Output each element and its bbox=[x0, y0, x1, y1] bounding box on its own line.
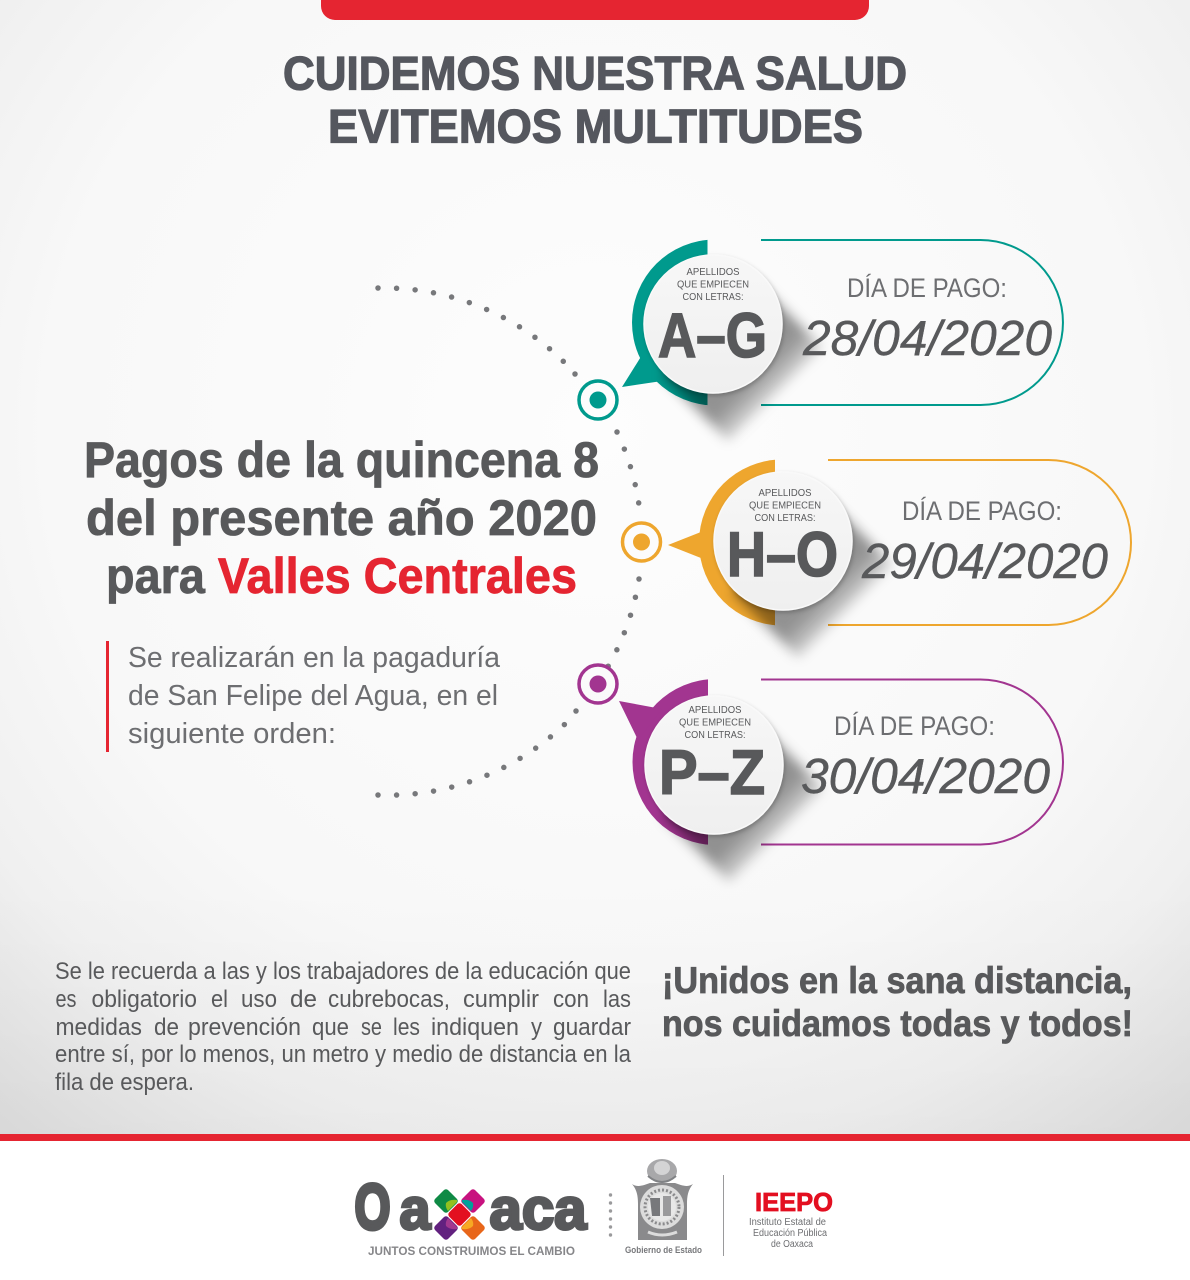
disc caption bbox=[679, 705, 751, 741]
reminder paragraph: medidas bbox=[56, 1014, 142, 1041]
reminder paragraph: es bbox=[56, 986, 76, 1013]
letters: A–G bbox=[658, 301, 767, 371]
logo divider bbox=[723, 1175, 724, 1256]
panel: H-O bbox=[668, 460, 1131, 658]
speech arc and tail bbox=[668, 460, 775, 626]
panel: P-Z bbox=[619, 679, 1063, 882]
title bbox=[283, 46, 907, 152]
heading: pagos: Pagos de la quincena 8 bbox=[84, 432, 599, 488]
disc caption: QUE EMPIECEN bbox=[677, 280, 749, 290]
logo: IEEPO bbox=[749, 1187, 833, 1250]
disc caption: CON LETRAS: bbox=[754, 513, 816, 524]
target marker: orange bbox=[622, 523, 660, 561]
disc caption: APELLIDOS bbox=[688, 705, 742, 716]
text block: location bbox=[106, 641, 501, 752]
disc caption bbox=[749, 488, 821, 524]
long shadow bbox=[732, 498, 892, 658]
long shadow bbox=[663, 722, 823, 882]
pill outline bbox=[761, 680, 1063, 844]
caption: Gobierno de Estado bbox=[625, 1245, 702, 1255]
pay date: 29/04/2020 bbox=[861, 535, 1108, 589]
text block: location: siguiente orden: bbox=[128, 718, 336, 750]
reminder paragraph: indiquen bbox=[431, 1014, 519, 1041]
reminder paragraph: y bbox=[531, 1014, 542, 1041]
letters: P–Z bbox=[659, 738, 765, 808]
wordmark: O bbox=[354, 1171, 390, 1243]
colored diamonds bbox=[433, 1188, 486, 1241]
pay date: 30/04/2020 bbox=[801, 750, 1050, 804]
logo: coat of arms bbox=[625, 1159, 702, 1255]
slogan: ¡Unidos en la sana distancia, bbox=[662, 960, 1132, 1001]
heading: pagos: del presente año 2020 bbox=[86, 490, 597, 546]
reminder paragraph: cubrebocas, bbox=[328, 986, 450, 1013]
heading: pagos: para Valles Centrales bbox=[106, 548, 577, 604]
panel: A-G bbox=[622, 240, 1063, 441]
reminder paragraph: prevención bbox=[188, 1014, 301, 1041]
disc caption: QUE EMPIECEN bbox=[749, 500, 821, 512]
letters: H–O bbox=[727, 520, 838, 590]
reminder paragraph: entre sí, por lo menos, un metro y medio de distancia en la bbox=[55, 1041, 632, 1068]
long shadow bbox=[662, 281, 822, 441]
text block: location: Se realizarán en la pagaduría bbox=[128, 642, 501, 674]
top red bar bbox=[321, 0, 869, 20]
pay label: DÍA DE PAGO: bbox=[902, 496, 1062, 526]
reminder paragraph: les bbox=[393, 1014, 420, 1041]
reminder paragraph: de bbox=[290, 986, 317, 1013]
pill outline bbox=[828, 460, 1131, 625]
speech arc and tail bbox=[619, 679, 708, 845]
letter disc bbox=[645, 696, 783, 834]
reminder paragraph bbox=[55, 958, 632, 1096]
wordmark bbox=[354, 1171, 587, 1243]
letter disc bbox=[714, 472, 852, 610]
reminder paragraph: las bbox=[603, 986, 631, 1013]
red band bbox=[0, 1134, 1190, 1141]
logo: IEEPO: Educación Pública bbox=[753, 1228, 827, 1239]
disc caption: APELLIDOS bbox=[686, 267, 740, 278]
slogan bbox=[662, 960, 1133, 1044]
reminder paragraph: obligatorio bbox=[92, 986, 197, 1013]
pill outline bbox=[761, 240, 1063, 405]
pay date: 28/04/2020 bbox=[802, 312, 1052, 366]
disc caption bbox=[677, 267, 749, 303]
text block: location: de San Felipe del Agua, en el bbox=[128, 680, 498, 712]
shield bbox=[632, 1183, 693, 1240]
pay label: DÍA DE PAGO: bbox=[847, 273, 1007, 303]
disc caption: CON LETRAS: bbox=[684, 730, 746, 741]
wordmark: aca bbox=[490, 1177, 587, 1242]
eagle crest bbox=[647, 1159, 677, 1183]
disc caption: APELLIDOS bbox=[758, 488, 812, 499]
title: EVITEMOS MULTITUDES bbox=[328, 100, 863, 152]
logo: IEEPO: Instituto Estatal de bbox=[749, 1217, 826, 1228]
tagline: JUNTOS CONSTRUIMOS EL CAMBIO bbox=[368, 1244, 575, 1258]
disc caption: CON LETRAS: bbox=[682, 292, 744, 303]
dotted connector curve bbox=[378, 288, 639, 795]
speech arc and tail bbox=[622, 240, 708, 406]
reminder paragraph: el bbox=[211, 986, 228, 1013]
reminder paragraph: guardar bbox=[553, 1014, 631, 1041]
footer background bbox=[0, 1141, 1190, 1280]
target marker: purple bbox=[579, 665, 617, 703]
reminder paragraph: que bbox=[312, 1014, 349, 1041]
pay label: DÍA DE PAGO: bbox=[834, 711, 995, 741]
logo: IEEPO: IEEPO bbox=[755, 1187, 833, 1217]
reminder paragraph: de bbox=[154, 1014, 179, 1041]
wordmark: a bbox=[400, 1177, 431, 1242]
slogan: nos cuidamos todas y todos! bbox=[662, 1003, 1133, 1044]
dotted separator bbox=[609, 1193, 612, 1237]
target marker: teal bbox=[579, 381, 617, 419]
reminder paragraph: fila de espera. bbox=[55, 1069, 194, 1096]
reminder paragraph: Se le recuerda a las y los trabajadores de la educación que bbox=[55, 958, 631, 985]
disc caption: QUE EMPIECEN bbox=[679, 718, 751, 728]
logo: Oaxaca bbox=[354, 1171, 587, 1258]
reminder paragraph: uso bbox=[241, 986, 277, 1013]
reminder paragraph: con bbox=[553, 986, 589, 1013]
logo: IEEPO: de Oaxaca bbox=[771, 1239, 813, 1250]
letter disc bbox=[644, 255, 782, 393]
heading: pagos bbox=[84, 432, 599, 604]
reminder paragraph: cumplir bbox=[463, 986, 539, 1013]
title: CUIDEMOS NUESTRA SALUD bbox=[283, 46, 907, 100]
reminder paragraph: se bbox=[361, 1014, 382, 1041]
